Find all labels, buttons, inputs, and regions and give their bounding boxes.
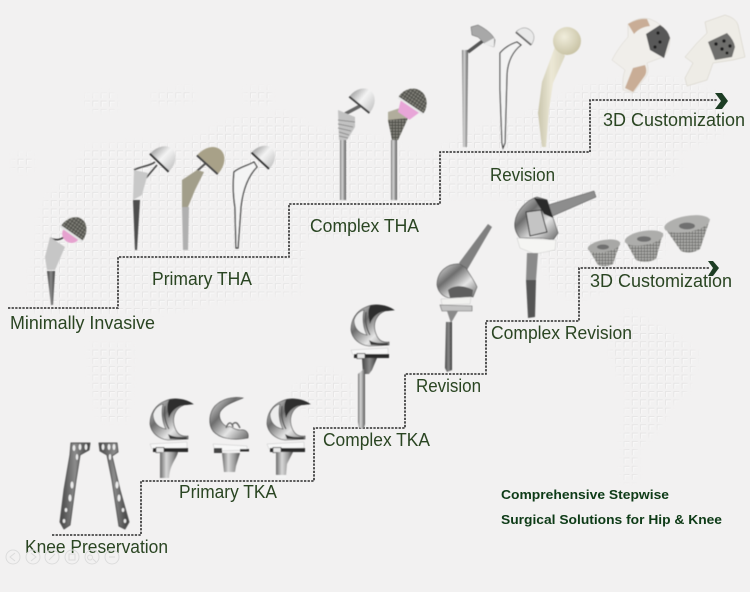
implant: minimally invasive hip xyxy=(45,211,93,305)
label: 3D Customization hip: 3D Customization xyxy=(603,110,745,130)
implant: revision hip slim stem xyxy=(500,24,538,148)
label: Knee Preservation: Knee Preservation xyxy=(25,537,168,557)
implant: primary TKA knee 2 xyxy=(210,397,249,472)
implant: revision cream femoral prosthesis xyxy=(538,27,581,147)
world map dot pattern xyxy=(18,79,720,478)
implant: 3D custom cone medium xyxy=(624,228,664,262)
label: Complex Revision: Complex Revision xyxy=(491,323,632,343)
label: 3D Customization knee: 3D Customization xyxy=(590,271,732,291)
implant: 3D custom acetabular bone 1 xyxy=(612,18,670,93)
arrow: knee stairs xyxy=(708,261,719,276)
implant: complex TKA stemmed knee xyxy=(351,305,394,428)
implant: complex revision hinged knee xyxy=(515,191,596,318)
implant: complex THA stem 2 xyxy=(388,83,433,200)
label: Primary THA: Primary THA xyxy=(152,269,252,289)
tagline: Surgical Solutions for Hip & Knee xyxy=(501,512,722,527)
implant: revision hip long stem xyxy=(462,25,495,147)
implant: knee preservation plate right xyxy=(99,443,129,529)
label: Primary TKA: Primary TKA xyxy=(179,482,277,502)
arrow: hip stairs xyxy=(715,93,728,109)
implant: knee preservation plate left xyxy=(60,443,90,529)
tagline xyxy=(501,487,722,527)
implant: primary THA stem 2 xyxy=(182,141,231,250)
implant: primary TKA knee 1 xyxy=(150,399,193,478)
implant: primary TKA knee 3 xyxy=(267,399,310,478)
implant: 3D custom cone small xyxy=(587,237,621,266)
tagline: Comprehensive Stepwise xyxy=(501,487,669,502)
label: Revision hip: Revision xyxy=(490,165,555,185)
stair line: knee xyxy=(52,268,710,535)
label: Minimally Invasive: Minimally Invasive xyxy=(10,313,155,333)
implant: 3D custom cone large xyxy=(663,212,711,253)
implant: 3D custom acetabular bone 2 xyxy=(685,15,745,86)
implant: revision knee xyxy=(437,224,492,372)
implant: primary THA stem 1 xyxy=(133,140,182,250)
label: Revision knee: Revision xyxy=(416,376,481,396)
implant: primary THA stem 3 xyxy=(233,140,281,248)
implant: complex THA stem 1 xyxy=(338,83,381,200)
label: Complex THA: Complex THA xyxy=(310,216,419,236)
label: Complex TKA: Complex TKA xyxy=(323,430,430,450)
faint slideshow control icons xyxy=(6,550,119,564)
stair line: hip xyxy=(8,100,717,308)
